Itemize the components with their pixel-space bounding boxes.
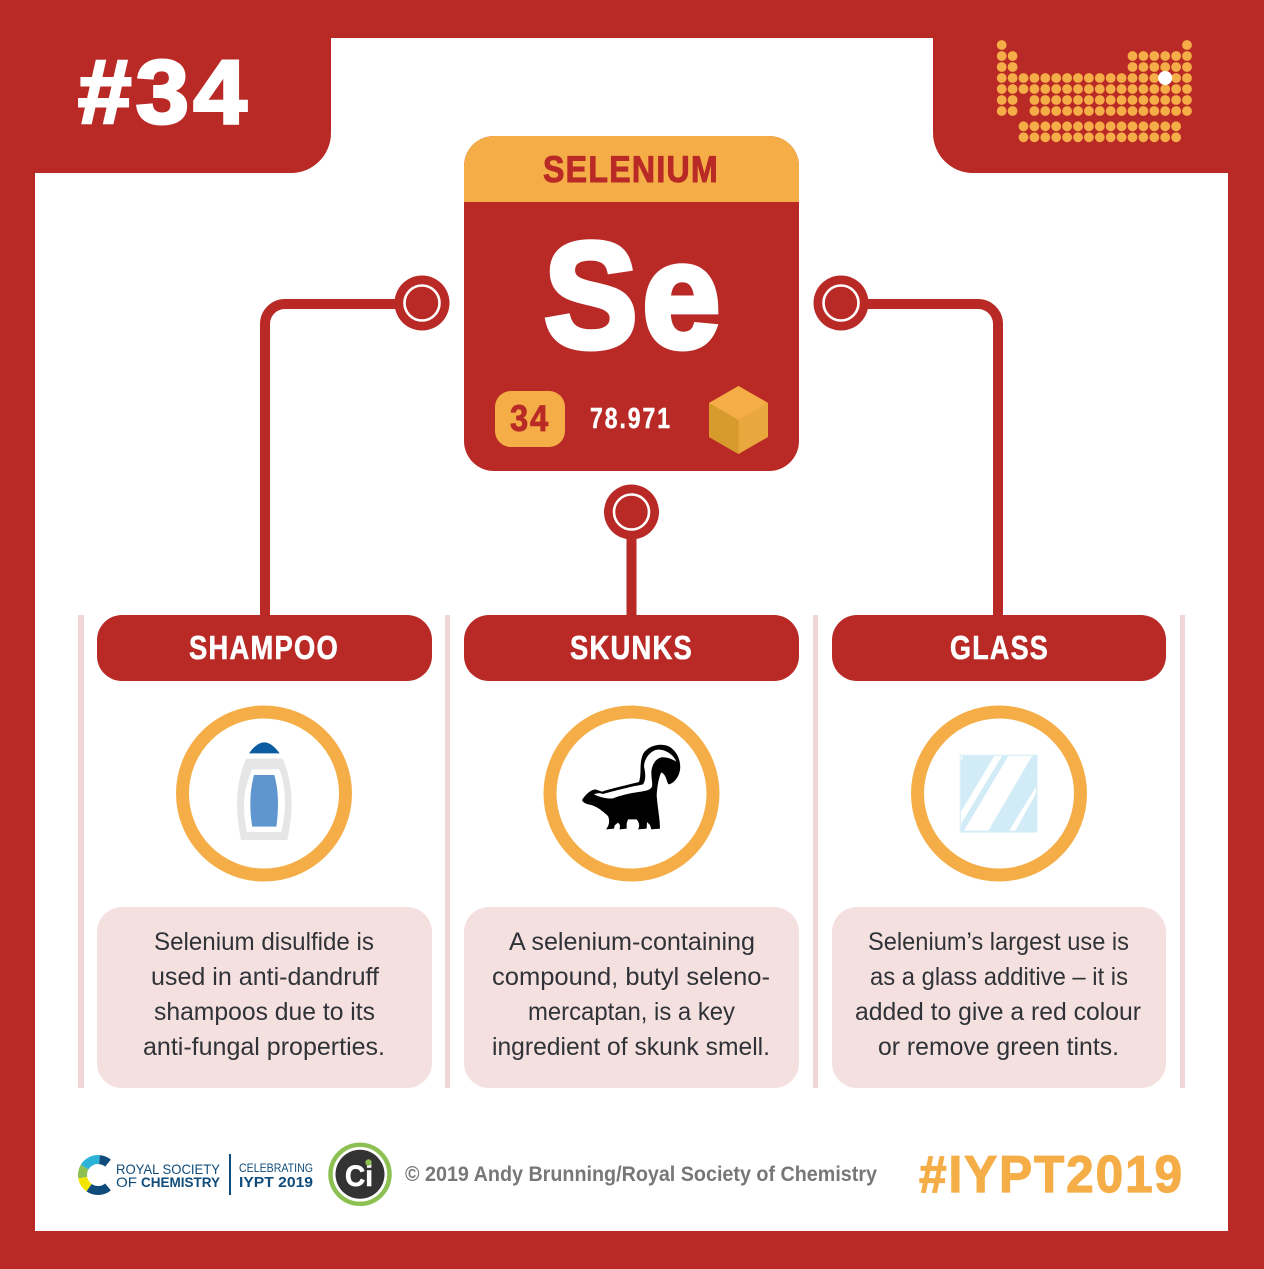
text: skunks description — [464, 907, 799, 1088]
logo: Compound Interest: Ci — [345, 1160, 373, 1193]
icon: skunk — [550, 712, 713, 875]
atomic mass: 78.971 — [590, 403, 672, 435]
text: shampoo description: anti-fungal properties. — [143, 1033, 385, 1061]
hashtag: #IYPT2019 — [919, 1146, 1184, 1204]
text: glass description — [832, 907, 1166, 1088]
element name: SELENIUM — [543, 149, 719, 190]
atomic number badge: 34 — [510, 398, 550, 439]
atomic number badge — [495, 391, 565, 447]
connector: left to shampoo — [265, 276, 450, 615]
panel: shampoo — [97, 615, 432, 1088]
text: skunks description: A selenium-containing — [509, 928, 755, 956]
icon: glass pane — [918, 712, 1080, 875]
heading: glass: GLASS — [950, 629, 1049, 666]
logo: Royal Society of Chemistry — [82, 1154, 313, 1195]
icon: periodic table — [1002, 45, 1188, 137]
icon: crystal cube — [709, 386, 768, 454]
panel: element card — [464, 136, 799, 471]
text: shampoo description: shampoos due to its — [154, 998, 375, 1026]
heading: glass — [832, 615, 1166, 681]
copyright text: © 2019 Andy Brunning/Royal Society of Chemistry — [405, 1163, 877, 1186]
text: glass description: added to give a red colour — [855, 998, 1141, 1026]
panel: glass — [832, 615, 1166, 1088]
connector: centre to skunks — [604, 484, 659, 615]
text: shampoo description: used in anti-dandruff — [151, 963, 379, 991]
icon: shampoo bottle — [182, 712, 346, 875]
heading: shampoo: SHAMPOO — [189, 629, 339, 666]
column dividers — [78, 615, 1185, 1088]
text: skunks description: ingredient of skunk smell. — [492, 1033, 770, 1061]
logo: Royal Society of Chemistry: CELEBRATING — [239, 1163, 313, 1175]
logo: Royal Society of Chemistry: ROYAL SOCIETY — [116, 1161, 221, 1177]
heading: shampoo — [97, 615, 432, 681]
element symbol: Se — [544, 211, 725, 379]
logo: Royal Society of Chemistry: IYPT 2019 — [239, 1174, 313, 1191]
text: skunks description: mercaptan, is a key — [528, 998, 735, 1026]
heading: skunks: SKUNKS — [570, 629, 693, 666]
logo: Royal Society of Chemistry: OF — [116, 1174, 137, 1190]
panel: skunks — [464, 615, 799, 1088]
heading: skunks — [464, 615, 799, 681]
heading: element number: #34 — [78, 43, 251, 143]
text: shampoo description: Selenium disulfide is — [154, 928, 374, 956]
text: glass description: as a glass additive – it is — [870, 963, 1128, 991]
text: skunks description: compound, butyl seleno- — [492, 963, 770, 991]
text: glass description: Selenium’s largest use is — [868, 928, 1129, 956]
text: glass description: or remove green tints. — [878, 1033, 1119, 1061]
text: shampoo description — [97, 907, 432, 1088]
logo: Royal Society of Chemistry: CHEMISTRY — [141, 1174, 221, 1190]
logo: Compound Interest — [330, 1145, 390, 1204]
connector: right to glass — [814, 276, 998, 615]
